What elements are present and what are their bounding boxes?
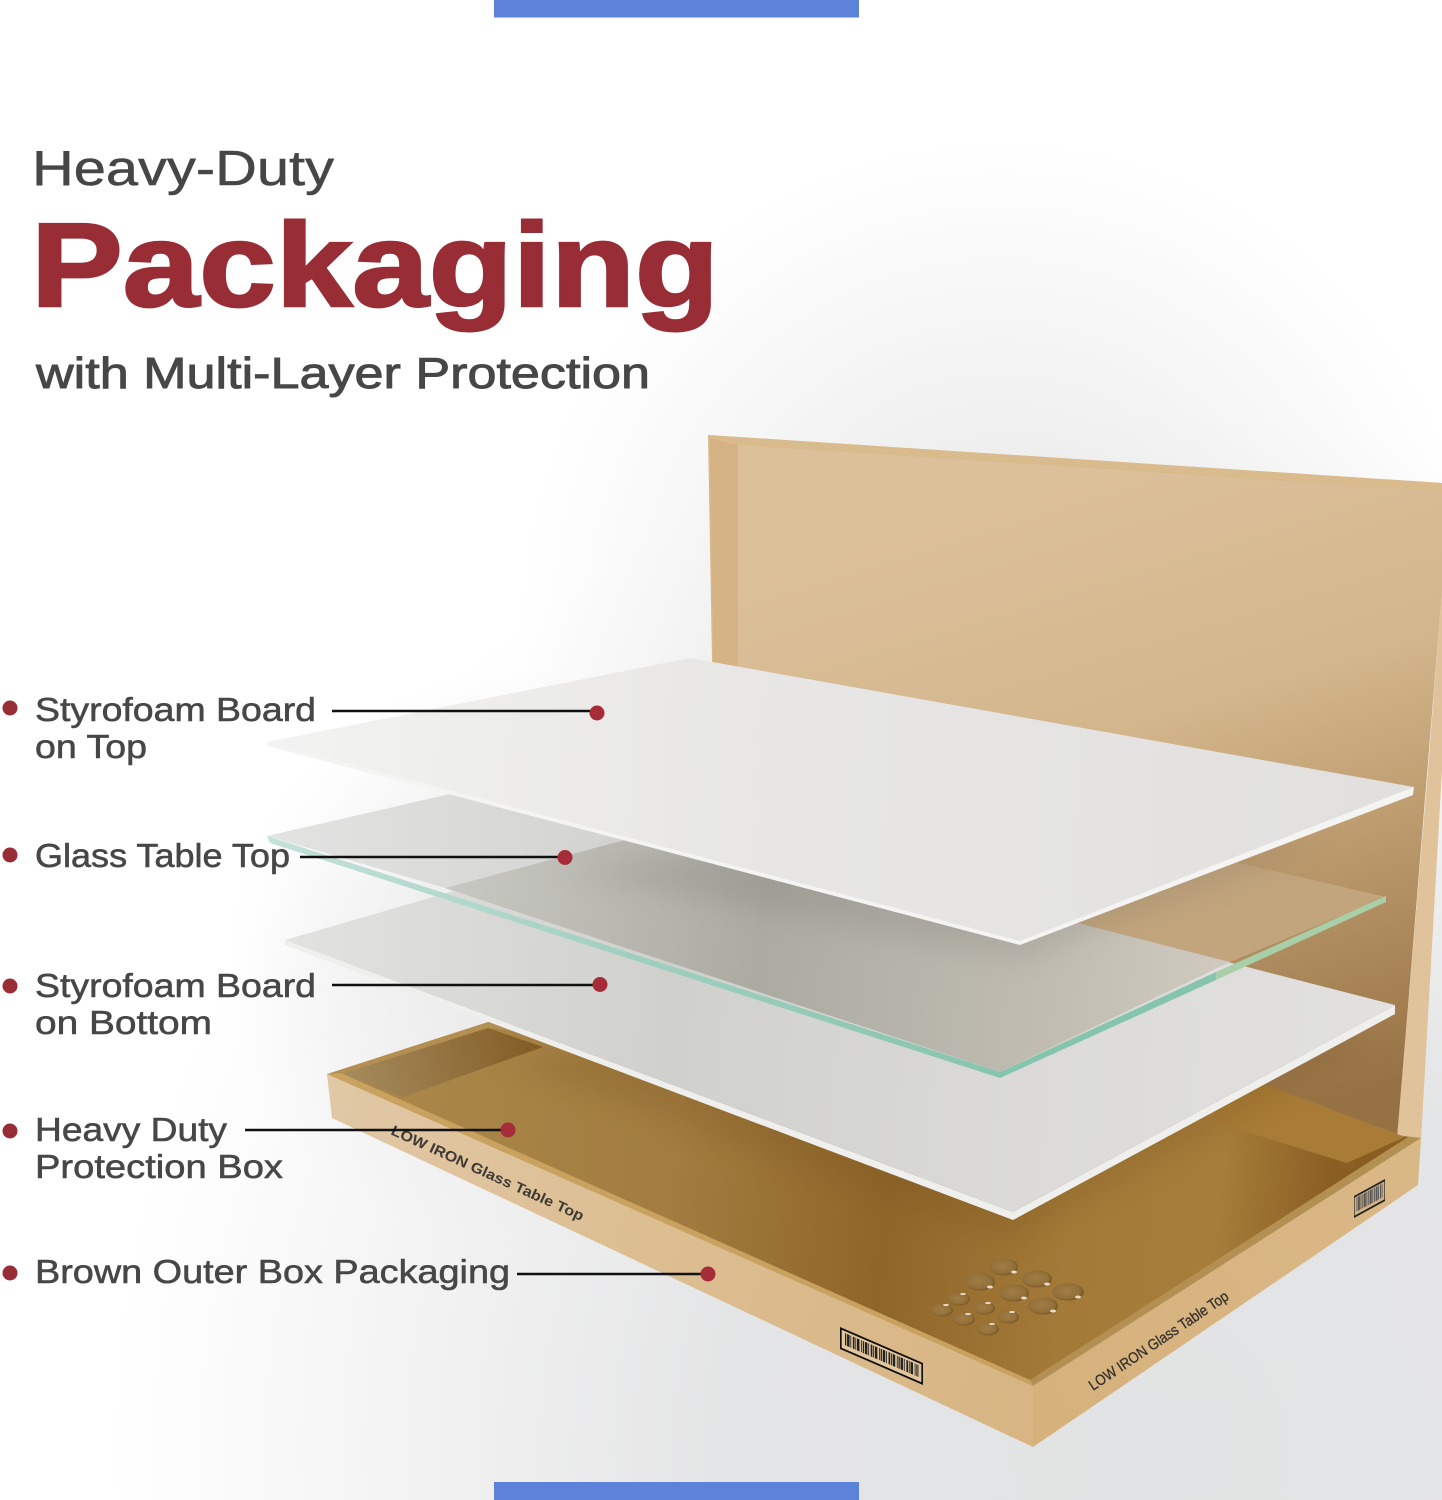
box lid standing upright [708, 435, 1442, 1140]
title line 3: with Multi-Layer Protection [35, 349, 650, 398]
title line 2: Packaging [31, 199, 719, 332]
barcode front [841, 1328, 922, 1384]
open box illustration [267, 435, 1442, 1447]
outer box tray [327, 1022, 1421, 1447]
top blue bar [494, 0, 859, 18]
bottom styrofoam board [285, 823, 1395, 1220]
bottom blue bar [494, 1482, 859, 1500]
label: styrofoam board on top: Styrofoam Board [35, 691, 316, 728]
glass table top [267, 737, 1386, 1078]
title [31, 142, 719, 398]
label: glass table top [2, 837, 572, 874]
top foam shadow [560, 820, 1330, 960]
label: heavy duty protection box: Protection Box [35, 1148, 284, 1185]
label: styrofoam board on top [2, 691, 604, 765]
box side print: LOW IRON Glass Table Top [388, 1123, 586, 1225]
rubber bumper pads [931, 1258, 1084, 1336]
box end print: LOW IRON Glass Table Top [1086, 1288, 1232, 1394]
label: styrofoam board on bottom: on Bottom [35, 1004, 212, 1041]
label: heavy duty protection box [2, 1111, 516, 1185]
label: styrofoam board on bottom: Styrofoam Board [35, 967, 316, 1004]
label: brown outer box packaging [2, 1253, 716, 1290]
label: brown outer box packaging: Brown Outer Box Packaging [35, 1253, 510, 1290]
label: styrofoam board on top: on Top [35, 728, 147, 765]
top styrofoam board [267, 658, 1414, 945]
barcode end [1354, 1180, 1385, 1217]
label: styrofoam board on bottom [2, 967, 608, 1041]
bottom foam shadow on tray [500, 1000, 1380, 1240]
label: glass table top: Glass Table Top [35, 837, 290, 874]
title line 1: Heavy-Duty [32, 142, 335, 196]
labels and leader lines [2, 691, 716, 1290]
label: heavy duty protection box: Heavy Duty [35, 1111, 228, 1148]
